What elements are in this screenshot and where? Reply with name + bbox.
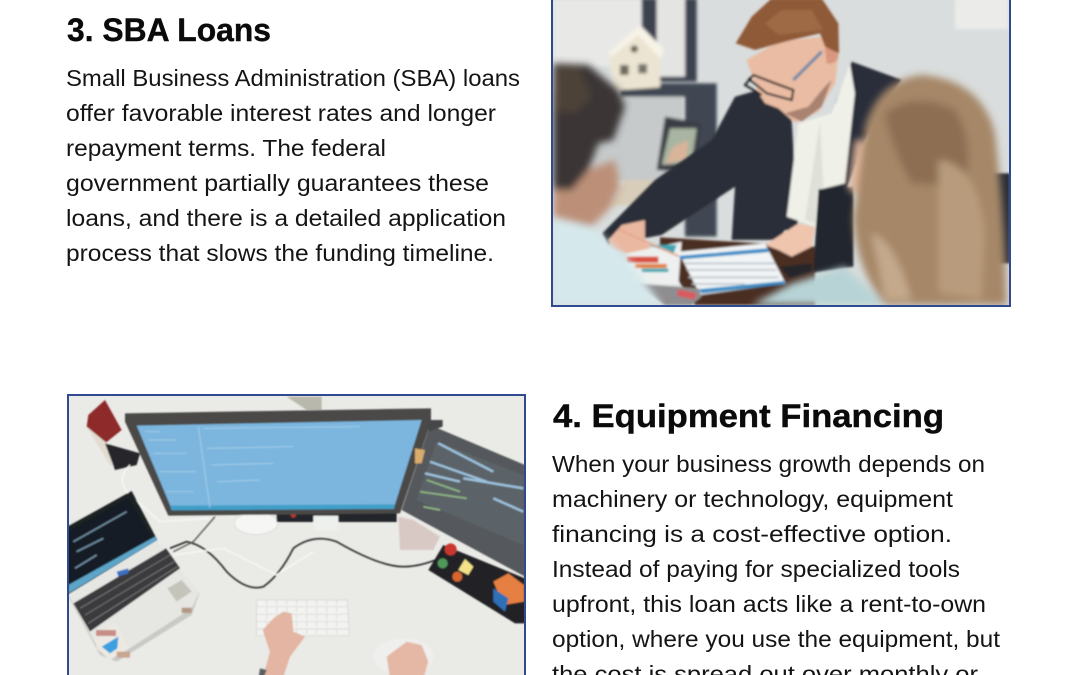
text block: SBA loans description: government partially guarantees these xyxy=(66,170,489,196)
text block: equipment financing description: financing is a cost-effective option. xyxy=(552,521,952,547)
text block: SBA loans description: Small Business Administration (SBA) loans xyxy=(66,65,520,91)
text block: equipment financing description: When your business growth depends on xyxy=(552,451,985,477)
text block: equipment financing description: Instead of paying for specialized tools xyxy=(552,556,960,582)
photo: loan advisor meeting with clients xyxy=(552,0,1010,306)
text block: SBA loans description: offer favorable interest rates and longer xyxy=(66,100,496,126)
text block: SBA loans description: loans, and there is a detailed application xyxy=(66,205,506,231)
heading: 4. Equipment Financing: 4. Equipment Financing xyxy=(553,398,944,434)
text block: equipment financing description xyxy=(552,451,1000,675)
text block: equipment financing description: upfront, this loan acts like a rent-to-own xyxy=(552,591,986,617)
text block: SBA loans description xyxy=(66,65,520,266)
panel: SBA loans text xyxy=(66,12,520,266)
photo: desk with monitors and laptop xyxy=(67,395,525,675)
panel: equipment financing text xyxy=(552,398,1000,675)
text block: equipment financing description: machinery or technology, equipment xyxy=(552,486,953,512)
heading: 3. SBA Loans: 3. SBA Loans xyxy=(67,12,271,48)
text block: SBA loans description: repayment terms. The federal xyxy=(66,135,386,161)
text block: equipment financing description: option, where you use the equipment, but xyxy=(552,626,1000,652)
text block: SBA loans description: process that slows the funding timeline. xyxy=(66,240,494,266)
